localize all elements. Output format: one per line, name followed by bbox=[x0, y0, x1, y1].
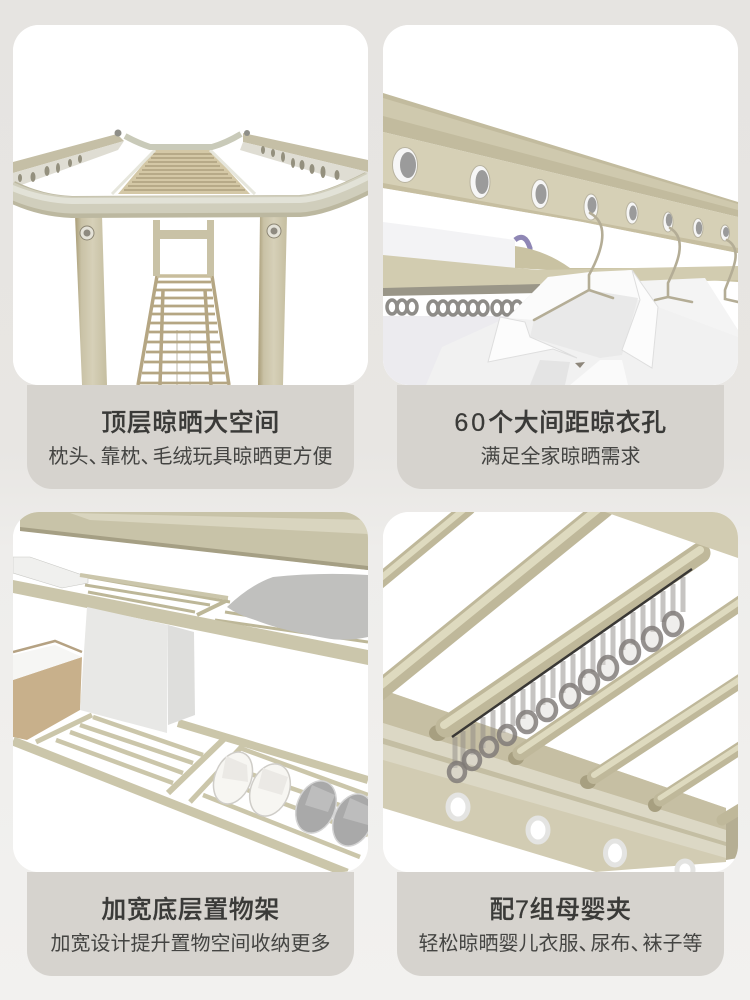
lower grey garment bbox=[383, 316, 533, 385]
back upright frame bbox=[153, 220, 214, 276]
hangers bbox=[534, 213, 738, 320]
caption: baby clips bbox=[397, 872, 724, 976]
clip row bbox=[387, 300, 522, 315]
lower ladder rack bbox=[138, 276, 229, 385]
baby clip strip bbox=[449, 569, 692, 781]
panel: drying holes photo bbox=[383, 25, 738, 385]
caption heading: 顶层晾晒大空间 bbox=[101, 409, 280, 437]
panel: baby clips photo bbox=[383, 512, 738, 872]
right side rail with holes bbox=[240, 130, 368, 188]
upper shelf front tube bbox=[13, 575, 368, 665]
main bar with holes bbox=[383, 693, 738, 879]
basket bbox=[13, 641, 82, 740]
caption description: 枕头、靠枕、毛绒玩具晾晒更方便 bbox=[48, 446, 332, 468]
left side rail with holes bbox=[13, 130, 124, 188]
lower bar bbox=[383, 246, 738, 296]
front curved tube bbox=[10, 176, 370, 207]
main rail with holes bbox=[383, 93, 738, 253]
bottom shelf bbox=[13, 715, 368, 873]
angled tubes bbox=[375, 504, 745, 820]
caption: clothes-drying holes bbox=[397, 385, 724, 489]
caption heading: 加宽底层置物架 bbox=[101, 896, 280, 924]
upper ladder rack bbox=[112, 150, 255, 194]
panel: bottom shelf photo bbox=[13, 512, 368, 872]
hanging towel bbox=[80, 607, 195, 733]
caption description: 轻松晾晒婴儿衣服、尿布、袜子等 bbox=[418, 933, 702, 955]
right post bbox=[258, 215, 287, 385]
left post bbox=[75, 215, 107, 385]
pillow bbox=[227, 574, 368, 640]
top rail bbox=[20, 512, 368, 570]
folded white towel bbox=[13, 557, 88, 588]
caption heading: 配7组母婴夹 bbox=[490, 896, 631, 924]
caption heading: 60个大间距晾衣孔 bbox=[454, 409, 667, 437]
panel: top drying layer photo bbox=[13, 25, 368, 385]
top corner band bbox=[605, 512, 738, 558]
caption description: 满足全家晾晒需求 bbox=[480, 446, 640, 468]
upper back arch bbox=[125, 134, 241, 147]
caption description: 加宽设计提升置物空间收纳更多 bbox=[50, 933, 330, 955]
caption: top layer space bbox=[27, 385, 354, 489]
slippers bbox=[206, 746, 381, 852]
purple hanger loop bbox=[515, 237, 530, 262]
second shirt bbox=[638, 278, 738, 345]
main shirt bbox=[426, 270, 738, 385]
upper shelf rungs bbox=[85, 577, 368, 642]
caption: bottom storage shelf bbox=[27, 872, 354, 976]
background hanging garment bbox=[383, 222, 515, 268]
